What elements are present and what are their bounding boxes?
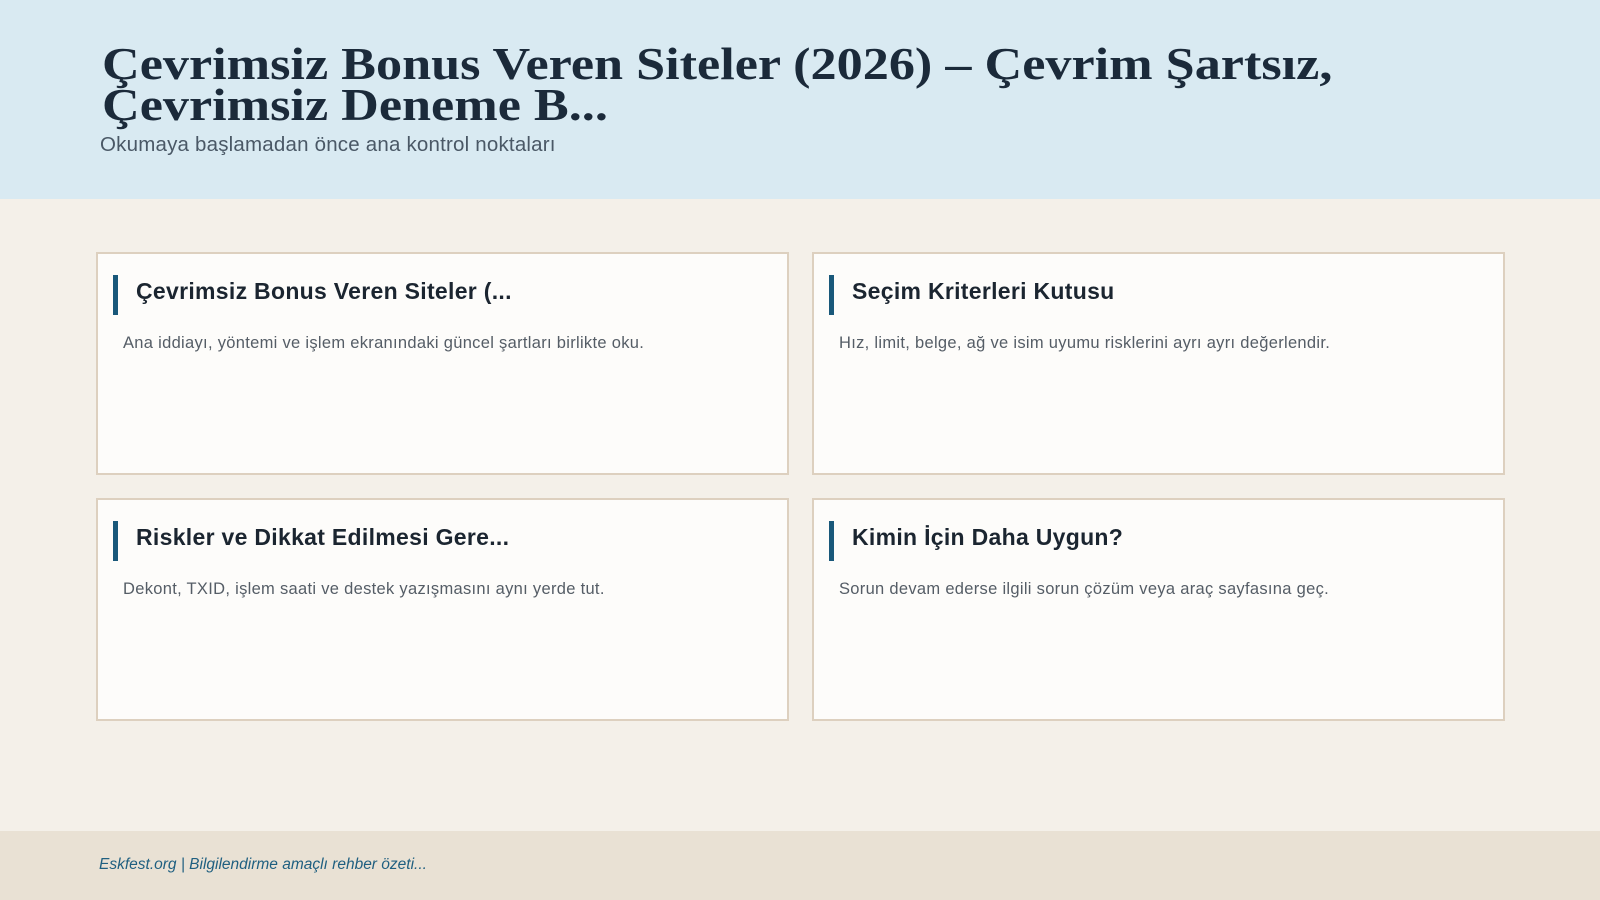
panel: card 2 [812,252,1505,475]
panel: card 3 [96,498,789,721]
panel: card 4 [812,498,1505,721]
header band [0,0,1600,199]
card 4 heading: Kimin İçin Daha Uygun? [852,524,1123,550]
card 2 heading: Seçim Kriterleri Kutusu [852,278,1115,304]
card 4 text: Sorun devam ederse ilgili sorun çözüm veya araç sayfasına geç. [839,580,1329,598]
title: Çevrimsiz Deneme B... [102,80,608,130]
card 2 text: Hız, limit, belge, ağ ve isim uyumu risklerini ayrı ayrı değerlendir. [839,334,1330,352]
subtitle: Okumaya başlamadan önce ana kontrol noktaları [100,133,556,156]
card 3 heading: Riskler ve Dikkat Edilmesi Gere... [136,524,509,550]
card 1 heading: Çevrimsiz Bonus Veren Siteler (... [136,278,512,304]
footer text: Eskfest.org | Bilgilendirme amaçlı rehber özeti... [99,856,427,873]
panel: card 1 [96,252,789,475]
card 1 text: Ana iddiayı, yöntemi ve işlem ekranındaki güncel şartları birlikte oku. [123,334,644,352]
title: Çevrimsiz Bonus Veren Siteler (2026) – Çevrim Şartsız, [102,39,1332,89]
title [102,39,1332,130]
footer [0,831,1600,900]
card 3 text: Dekont, TXID, işlem saati ve destek yazışmasını aynı yerde tut. [123,580,605,598]
